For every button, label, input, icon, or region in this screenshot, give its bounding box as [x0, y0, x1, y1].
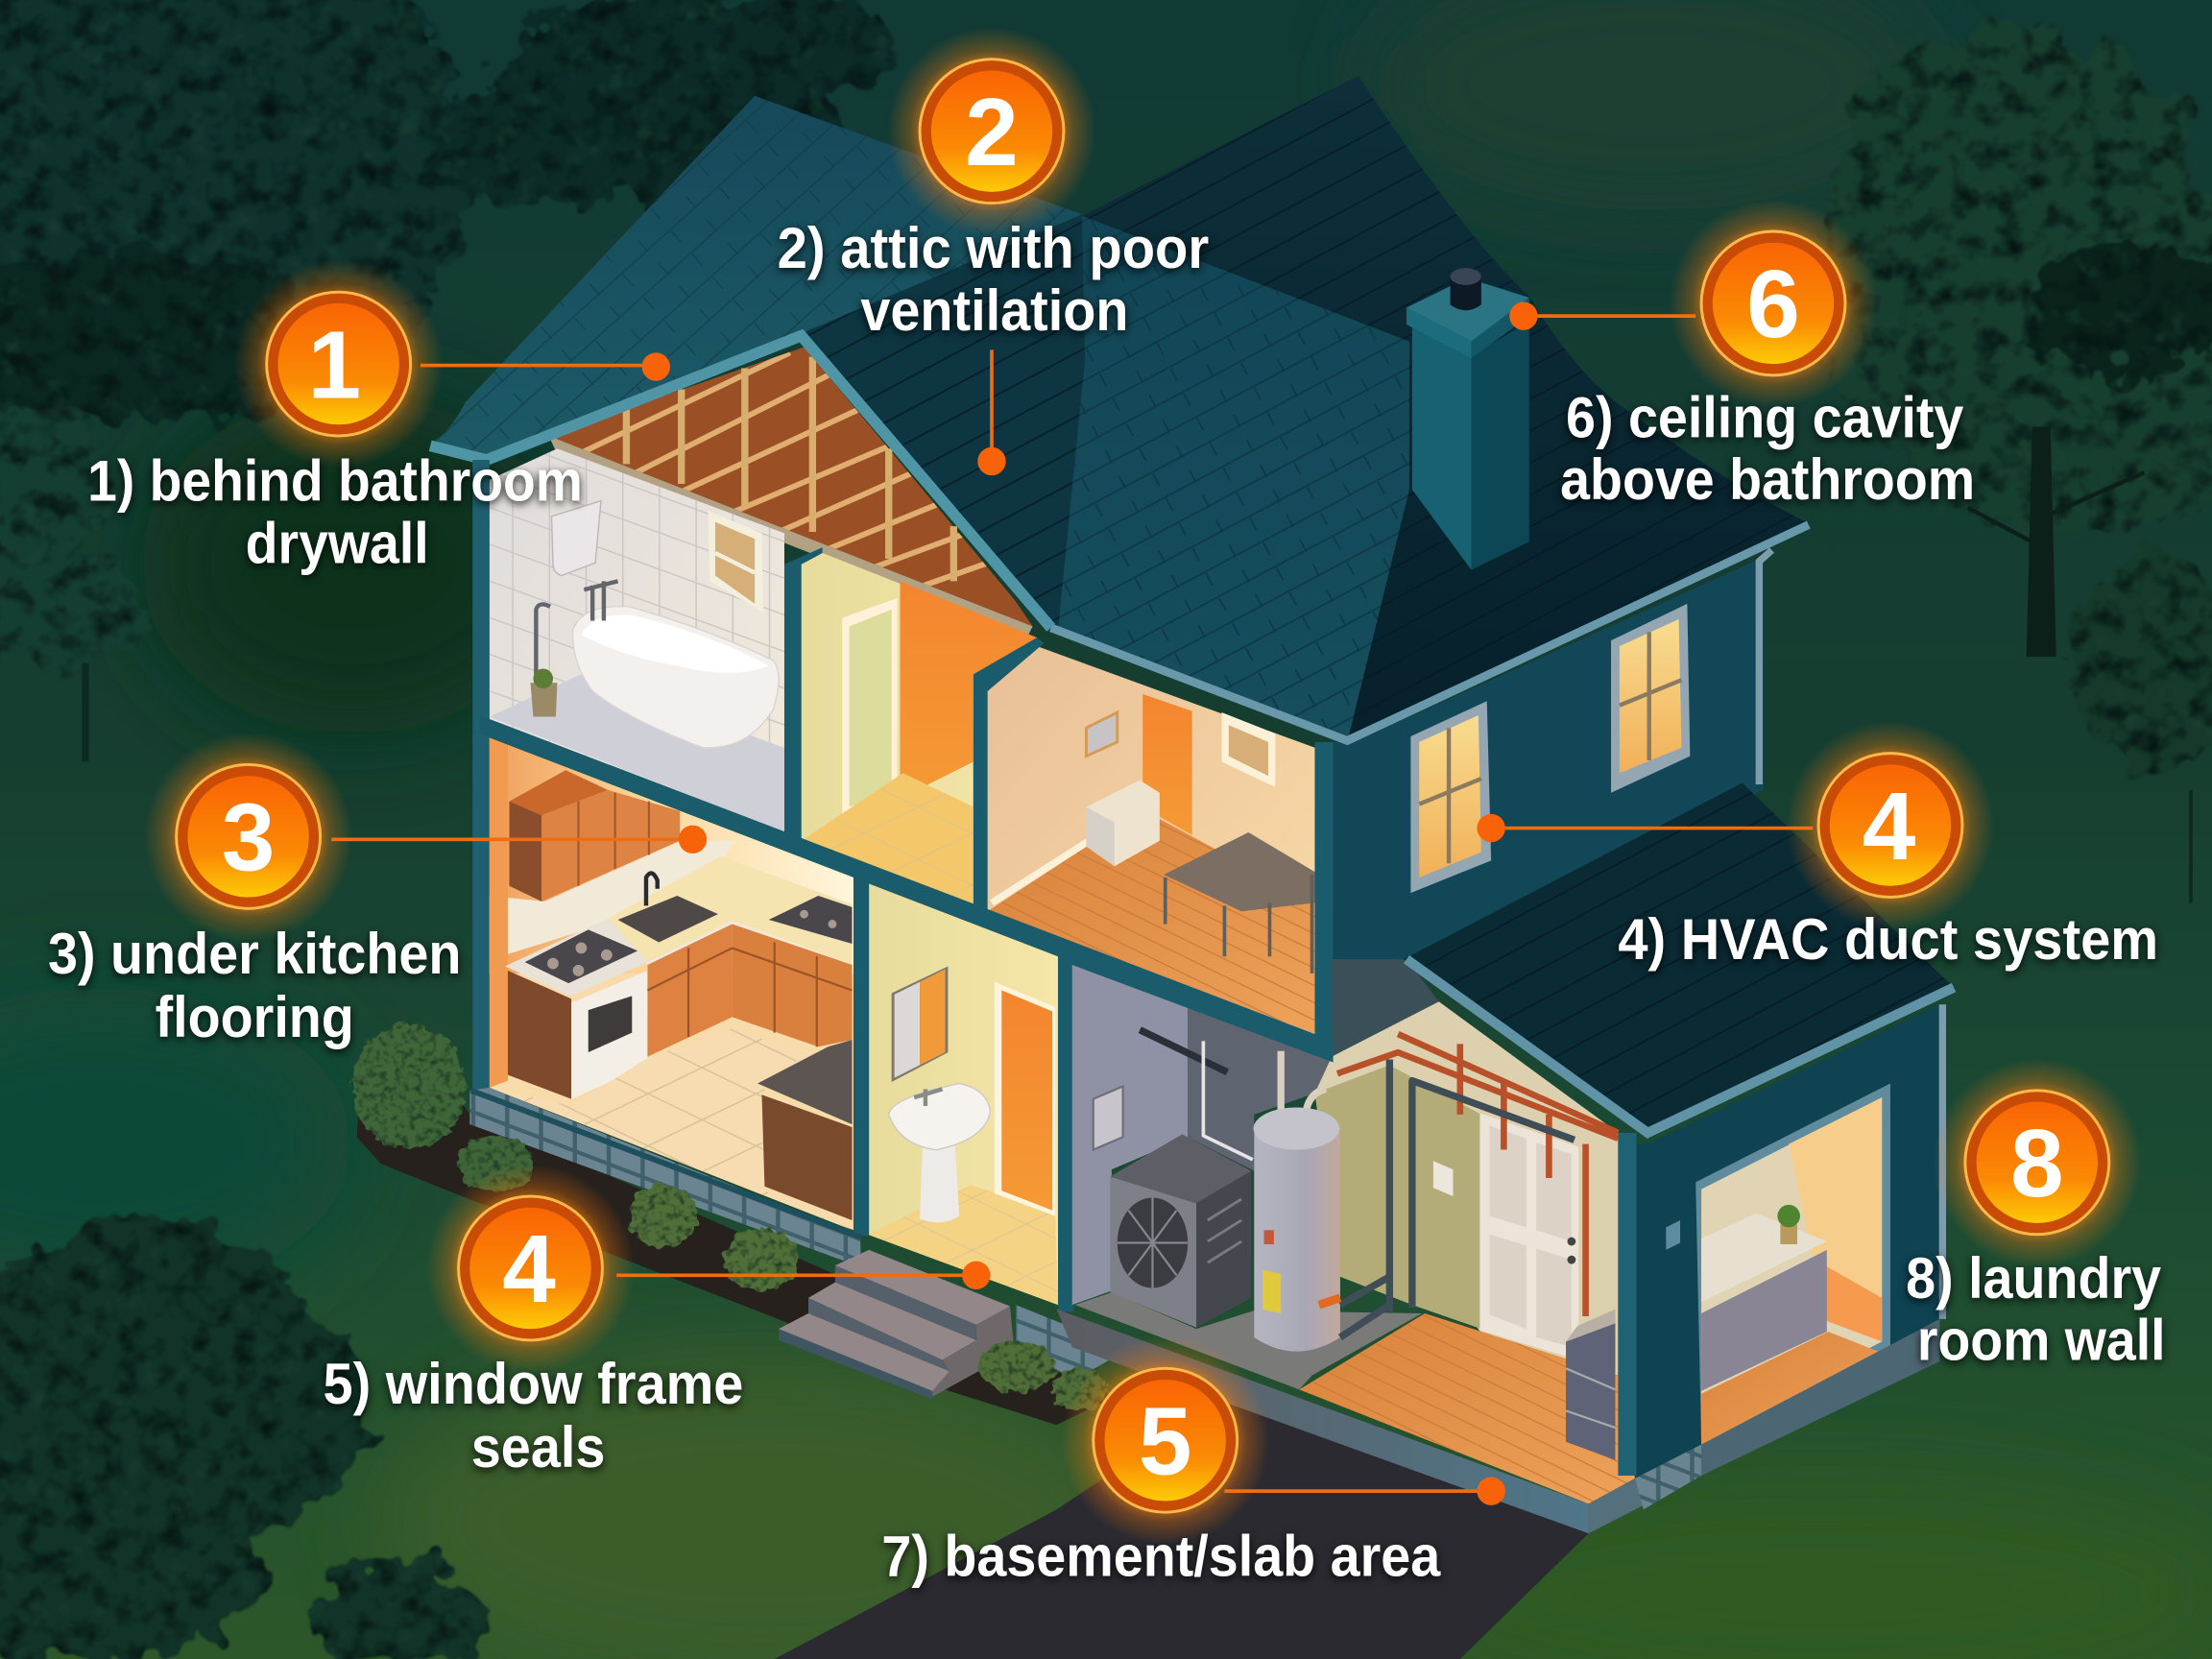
label 5	[323, 1351, 743, 1479]
tree mass: right lower	[2070, 550, 2212, 776]
vent panel	[1094, 1086, 1123, 1150]
orange accent wall	[1142, 694, 1192, 835]
label 4: 4) HVAC duct system	[1618, 906, 2158, 972]
shrubs	[352, 1024, 1107, 1410]
house: cutaway building	[430, 76, 1954, 1533]
label 5: 5) window frame	[323, 1351, 743, 1416]
room: mechanical basement	[1072, 959, 1635, 1503]
faucet	[536, 581, 618, 691]
roof plane: gable left slope	[430, 96, 1082, 460]
leader line and dot: 7 basement	[1224, 1477, 1505, 1505]
gray left wall	[1072, 964, 1188, 1305]
chimney flue	[1451, 268, 1481, 310]
window: upper wall left	[1410, 701, 1491, 893]
roof plane: gable shaded side	[803, 214, 1085, 629]
hall floor	[802, 773, 974, 905]
badge 3	[144, 733, 352, 941]
upper floor band and dividers	[480, 547, 1334, 1062]
label 1: 1) behind bathroom	[87, 448, 583, 514]
wall switch	[1433, 1161, 1453, 1196]
olive wall	[1314, 1065, 1481, 1329]
cooktop	[769, 896, 853, 944]
counter	[505, 856, 853, 992]
wood floor	[1299, 1313, 1635, 1503]
upper right wall	[1334, 557, 1764, 1058]
label 8	[1906, 1245, 2166, 1372]
badge 6	[1669, 199, 1878, 408]
AC unit	[1110, 1134, 1251, 1328]
badge 1	[234, 259, 443, 469]
laundry opening	[1695, 1083, 1890, 1445]
label 2	[778, 215, 1209, 343]
room: kitchen	[490, 737, 854, 1230]
tree mass: top centre	[445, 0, 902, 204]
outlet	[1666, 1220, 1680, 1250]
backsplash	[490, 841, 735, 974]
badge 2	[887, 27, 1096, 235]
leader line and dot: 2	[977, 349, 1006, 475]
teal band above basement	[1058, 937, 1334, 1062]
leader line and dot: 5 window	[616, 1262, 991, 1289]
badge 6: 6	[1746, 252, 1800, 358]
badge 1: 1	[307, 312, 361, 419]
label 8: room wall	[1917, 1307, 2166, 1372]
foundation stone: right of steps	[1016, 1305, 1115, 1380]
lower roof	[1404, 783, 1954, 1133]
beige gable wall	[1314, 1001, 1618, 1475]
table and chairs	[1164, 832, 1314, 974]
leader line and dot: 1	[421, 352, 670, 381]
entry steps	[779, 1250, 1014, 1400]
driveway	[775, 1389, 1589, 1659]
hall door	[842, 598, 898, 815]
kitchen floor	[490, 1028, 853, 1230]
floor cabinet	[1566, 1310, 1615, 1460]
badge 2: 2	[965, 80, 1019, 186]
bathroom floor	[868, 1185, 1058, 1305]
laundry slab	[1701, 1319, 1939, 1476]
downspout	[1759, 550, 1772, 784]
leader line and dot: 6	[1509, 301, 1695, 330]
foundation stone	[469, 1088, 860, 1267]
island	[757, 1040, 853, 1220]
gable fascia	[430, 336, 1051, 628]
mirror	[892, 967, 948, 1082]
label 6: 6) ceiling cavity	[1566, 385, 1964, 450]
label 3: 3) under kitchen	[48, 921, 461, 986]
roof plane: front centre	[1058, 216, 1409, 736]
label 6: above bathroom	[1560, 446, 1975, 512]
label 7: 7) basement/slab area	[881, 1523, 1441, 1588]
chimney	[1407, 268, 1529, 570]
lower cabinets	[647, 924, 853, 1057]
tree mass: top left	[0, 0, 480, 423]
laundry wing wall	[1618, 1004, 1942, 1479]
storage box	[1086, 781, 1160, 866]
badge 4 right	[1786, 721, 1995, 929]
tree trunk: right	[1968, 429, 2144, 655]
bathtub	[572, 607, 779, 748]
roof plane: far right dark	[1082, 76, 1809, 736]
lower roof fascia	[1407, 959, 1954, 1133]
tree mass: bottom left	[0, 1220, 493, 1659]
plant pot	[530, 668, 557, 716]
laundry foundation stone	[1635, 1445, 1701, 1509]
laundry counter	[1701, 1214, 1827, 1302]
label 3	[48, 921, 461, 1049]
pipes	[1140, 1030, 1618, 1316]
label 6	[1560, 385, 1975, 512]
badge 3: 3	[222, 785, 275, 892]
left orange wall strip	[490, 737, 508, 1088]
water heater	[1254, 1107, 1340, 1352]
tree trunk: lower right	[2190, 790, 2192, 902]
label 1: drywall	[246, 510, 429, 575]
tree trunk: left	[82, 663, 89, 761]
foundation cap line	[471, 1091, 860, 1238]
label 2: ventilation	[860, 277, 1129, 343]
kitchen and bath dividers	[854, 872, 1073, 1312]
attic studs	[626, 357, 953, 581]
gray back wall	[1188, 1007, 1334, 1171]
sink	[618, 873, 718, 943]
leader line and dot: 3	[331, 826, 707, 854]
oven	[508, 971, 647, 1099]
bedroom floor	[988, 809, 1314, 1036]
room: upstairs hall	[802, 553, 1037, 905]
window: upper wall right	[1611, 604, 1690, 793]
counter edges	[647, 924, 853, 968]
label 8: 8) laundry	[1906, 1245, 2162, 1310]
plant	[1777, 1205, 1800, 1244]
label 1	[87, 448, 583, 575]
room: downstairs bathroom	[868, 883, 1058, 1305]
badge 8: 8	[2010, 1111, 2064, 1217]
upper cabinets	[509, 770, 680, 902]
orange wall	[900, 581, 1037, 799]
mulch bed along the foundation	[357, 1044, 1115, 1425]
concrete pad	[1075, 1292, 1422, 1389]
leader line and dot: 4 HVAC	[1477, 814, 1813, 842]
label 2: 2) attic with poor	[778, 215, 1209, 280]
room: upstairs bedroom	[988, 646, 1314, 1037]
bathroom window	[709, 511, 763, 613]
label 5: seals	[471, 1414, 605, 1479]
badge 5	[1061, 1336, 1269, 1545]
left outer wall	[472, 460, 490, 1094]
tree mass: right	[1813, 28, 2212, 536]
attic cutaway with rafters	[430, 336, 1051, 637]
main roof	[430, 76, 1809, 740]
laundry floor	[1701, 1332, 1882, 1445]
door	[995, 982, 1055, 1216]
toilet tank	[552, 501, 601, 576]
tree mass: left lower	[0, 409, 148, 670]
wall picture	[1086, 712, 1118, 757]
room: upstairs bathroom	[490, 448, 784, 832]
roof eave trim	[1051, 525, 1809, 740]
badge 5: 5	[1139, 1389, 1192, 1496]
badge 4 right: 4	[1863, 774, 1916, 880]
badge 4 lower: 4	[502, 1216, 556, 1323]
bathroom floor	[490, 674, 784, 832]
pedestal sink	[889, 1083, 991, 1222]
label 3: flooring	[156, 984, 354, 1049]
bedroom window	[1221, 712, 1275, 787]
badge 8	[1933, 1058, 2142, 1267]
downspout	[1940, 1004, 1945, 1319]
attic ceiling beam	[549, 436, 1033, 637]
badge 4 lower	[426, 1164, 635, 1373]
heater valves	[1340, 1277, 1389, 1337]
slab edge	[1057, 1310, 1589, 1533]
stove top	[505, 919, 647, 996]
white door	[1479, 1113, 1578, 1359]
